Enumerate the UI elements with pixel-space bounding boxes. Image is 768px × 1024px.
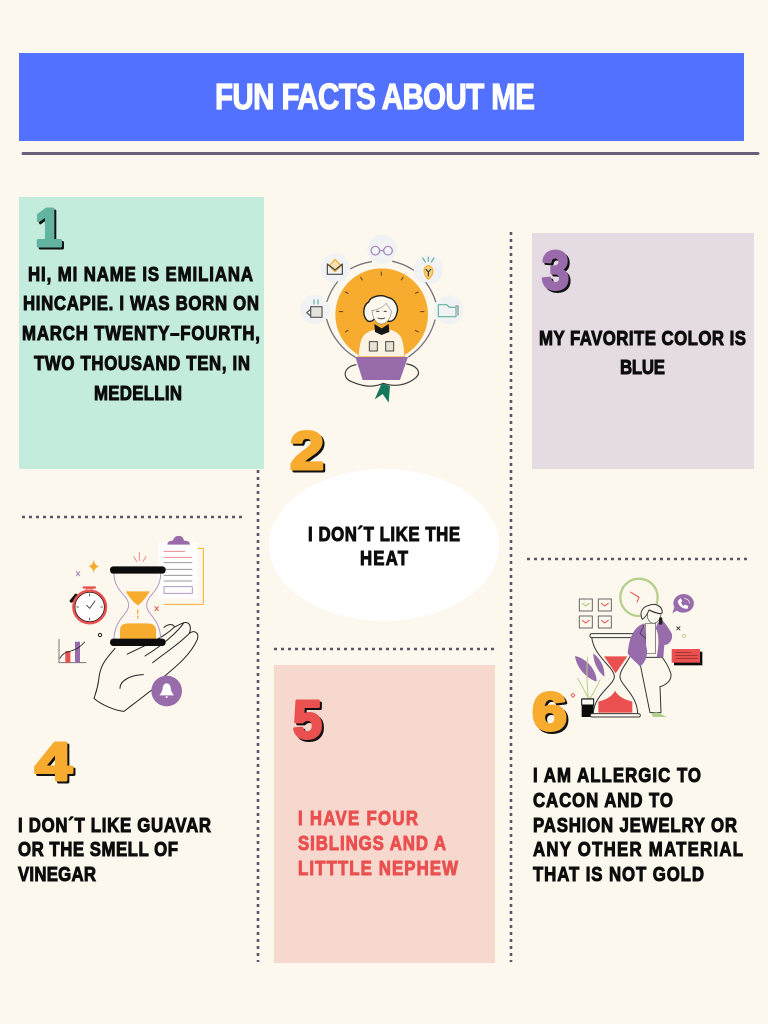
panel 1 text: HINCAPIE. I WAS BORN ON	[23, 291, 259, 314]
panel 6 text: ANY OTHER MATERIAL	[533, 837, 743, 860]
bell badge	[151, 676, 182, 706]
number 4: 4	[37, 734, 74, 794]
panel 4 text	[18, 813, 211, 885]
panel 2 text: I DON´T LIKE THE	[308, 522, 460, 545]
icon: mug	[307, 300, 322, 317]
panel 5: siblings	[274, 665, 495, 963]
person	[628, 604, 672, 717]
panel 1: name and birth	[19, 197, 264, 469]
panel 5 text: I HAVE FOUR	[298, 806, 418, 829]
panel 2: white ellipse	[269, 469, 499, 621]
number 2: 2	[290, 421, 324, 481]
hand	[94, 623, 198, 711]
hourglass	[590, 634, 640, 717]
panel 1 text	[22, 262, 260, 404]
panel 4 text: I DON´T LIKE GUAVAR	[18, 813, 211, 836]
panel 1 text: MARCH TWENTY–FOURTH,	[22, 321, 260, 344]
panel 5 text	[298, 806, 458, 879]
panel 3 text: MY FAVORITE COLOR IS	[539, 326, 746, 349]
number 6: 6	[534, 684, 569, 744]
title: FUN FACTS ABOUT ME	[215, 76, 535, 117]
panel 6 text	[533, 763, 743, 885]
number 3: 3	[542, 241, 569, 301]
phone speech bubble	[672, 594, 694, 613]
panel 1 text: MEDELLIN	[94, 381, 182, 404]
wall clock	[620, 579, 658, 616]
bar chart	[59, 639, 86, 663]
panel 1 text: TWO THOUSAND TEN, IN	[34, 351, 250, 374]
panel 4 text: VINEGAR	[18, 862, 96, 885]
icon: folder	[438, 305, 458, 317]
number 4: 4	[35, 732, 72, 792]
panel 4 text: OR THE SMELL OF	[18, 837, 178, 860]
number 2: 2	[292, 423, 326, 483]
icon: envelope	[327, 259, 342, 274]
icon: dumbbell	[371, 246, 392, 255]
number 5: 5	[293, 690, 322, 750]
red message card	[672, 649, 702, 665]
panel 5 text: SIBLINGS AND A	[298, 831, 446, 854]
title banner	[19, 53, 744, 141]
stopwatch	[71, 586, 106, 623]
number 1: 1	[35, 198, 62, 258]
panel 6 text: THAT IS NOT GOLD	[533, 862, 704, 885]
checkboxes	[579, 599, 611, 628]
illustration: person on phone beside hourglass	[571, 579, 702, 717]
hourglass	[110, 553, 166, 646]
panel 1 text: HI, MI NAME IS EMILIANA	[28, 262, 253, 285]
plant	[575, 653, 604, 717]
panel 4: dislikes	[18, 732, 211, 885]
number 5: 5	[295, 692, 324, 752]
panel 3 text	[539, 326, 746, 378]
icon: light bulb	[423, 257, 434, 279]
number 6: 6	[532, 682, 567, 742]
sparkles	[89, 560, 99, 573]
panel 2 text: HEAT	[360, 546, 408, 569]
panel 3: favorite color	[532, 233, 754, 469]
panel 3 text: BLUE	[620, 355, 665, 378]
illustration: hand holding hourglass	[59, 536, 203, 711]
panel 6 text: I AM ALLERGIC TO	[533, 763, 701, 786]
clipboard	[158, 536, 203, 604]
illustration: person at laptop with clock	[300, 235, 463, 403]
panel 6 text: PASHION JEWELRY OR	[533, 813, 737, 836]
panel 6 text: CACON AND TO	[533, 788, 673, 811]
number 1: 1	[37, 200, 64, 260]
number 3: 3	[544, 243, 571, 303]
panel 5 text: LITTTLE NEPHEW	[298, 856, 458, 879]
panel 2 text	[308, 522, 460, 569]
